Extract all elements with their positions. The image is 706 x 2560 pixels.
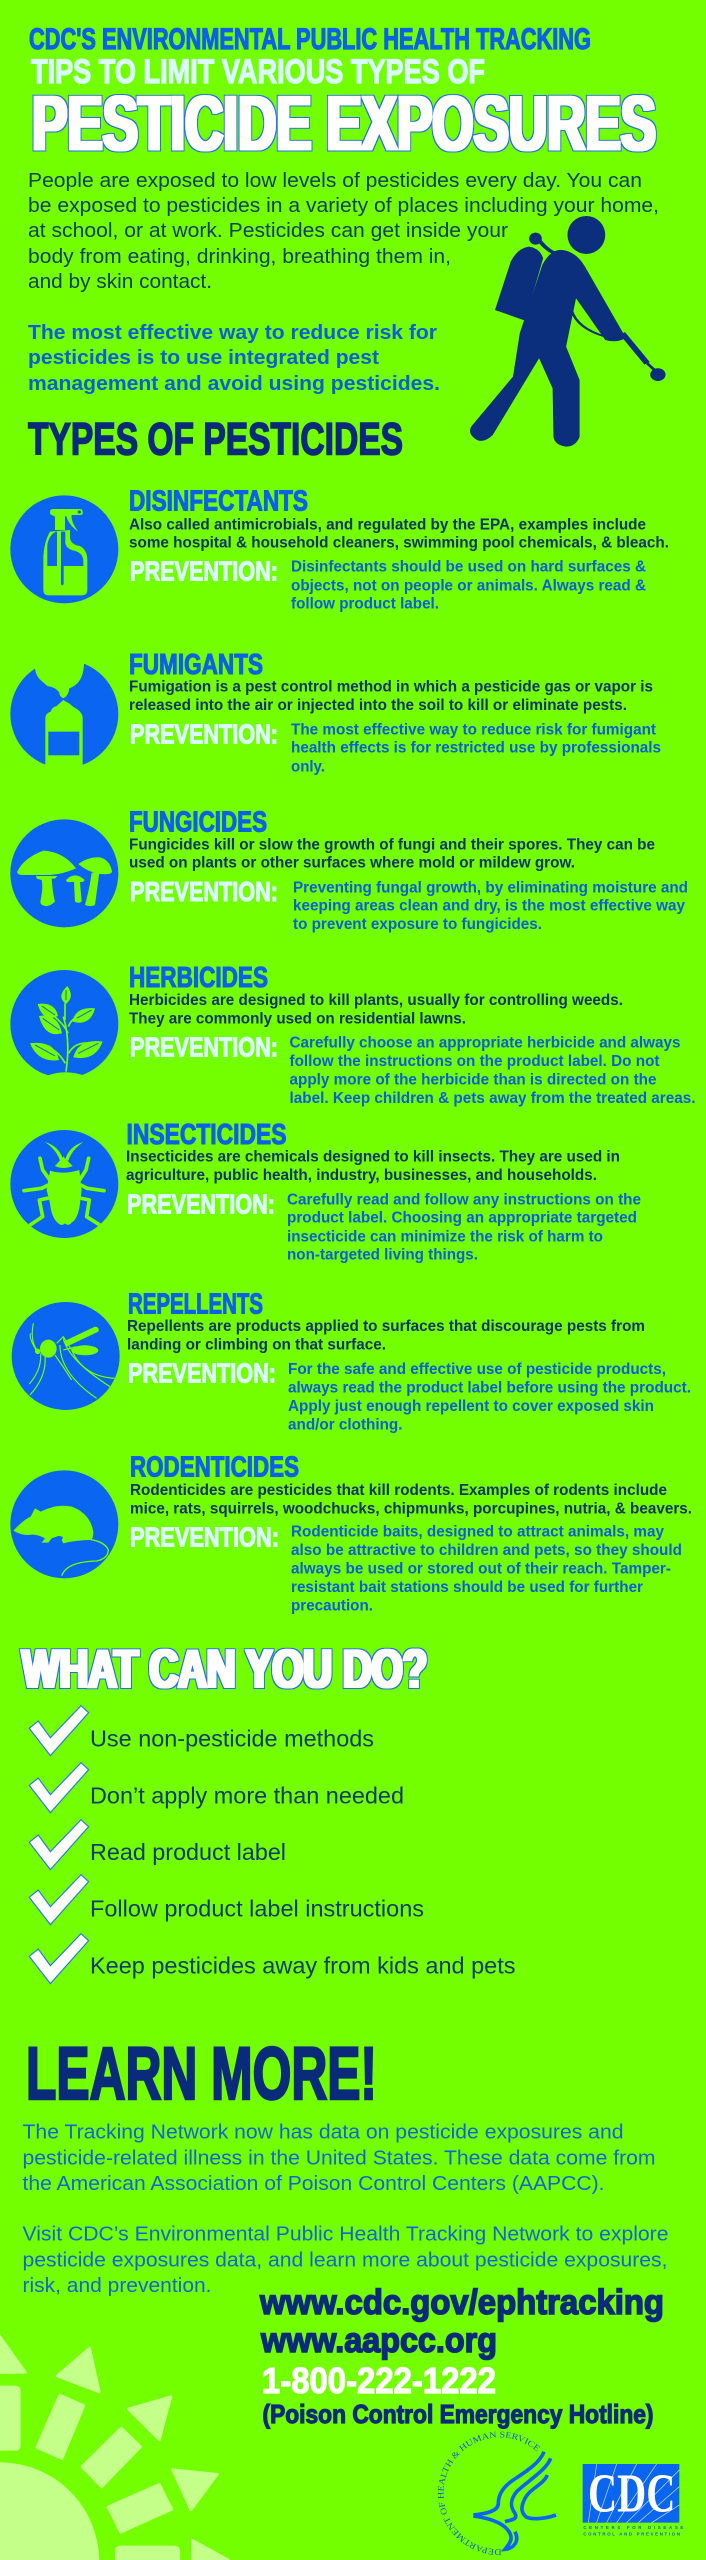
panel: fumigants	[10, 649, 661, 776]
prevention text: Disinfectants should be used on hard surfaces &	[291, 559, 646, 576]
contact links	[259, 2283, 664, 2429]
heading: RODENTICIDES	[130, 1452, 299, 1484]
prevention text: label. Keep children & pets away from the treated areas.	[290, 1090, 696, 1107]
panel: repellents	[12, 1288, 691, 1433]
icon: person spraying pesticide	[470, 216, 666, 447]
blue key message	[28, 322, 440, 395]
prevention label: PREVENTION:	[128, 1358, 276, 1389]
description	[129, 836, 655, 872]
prevention text: health effects is for restricted use by professionals	[291, 740, 661, 757]
learn more paragraph 1: the American Association of Poison Control Centers (AAPCC).	[22, 2173, 604, 2195]
prevention text: product label. Choosing an appropriate targeted	[287, 1210, 637, 1227]
prevention text	[291, 559, 646, 613]
prevention text	[287, 1191, 641, 1264]
prevention label: PREVENTION:	[130, 718, 278, 749]
icon: rat	[10, 1470, 118, 1578]
description: Herbicides are designed to kill plants, usually for controlling weeds.	[129, 992, 623, 1009]
prevention text: For the safe and effective use of pesticide products,	[288, 1361, 666, 1378]
description	[129, 992, 623, 1028]
prevention text: insecticide can minimize the risk of harm to	[287, 1228, 603, 1245]
description	[126, 1149, 620, 1184]
decorative sun	[0, 2335, 228, 2560]
prevention text: Rodenticide baits, designed to attract animals, may	[291, 1523, 664, 1540]
intro paragraph: be exposed to pesticides in a variety of places including your home,	[28, 194, 659, 217]
learn more paragraph 2: pesticide exposures data, and learn more about pesticide exposures,	[22, 2249, 668, 2271]
prevention text: resistant bait stations should be used for further	[291, 1579, 643, 1596]
heading: learn more: LEARN MORE!	[26, 2032, 377, 2115]
description	[129, 516, 669, 551]
prevention text: Preventing fungal growth, by eliminating moisture and	[293, 879, 688, 896]
prevention text: follow product label.	[291, 596, 439, 613]
prevention text: Carefully choose an appropriate herbicide and always	[290, 1035, 681, 1052]
title line: tips: TIPS TO LIMIT VARIOUS TYPES OF	[31, 53, 485, 91]
prevention text: apply more of the herbicide than is directed on the	[290, 1072, 657, 1089]
intro paragraph: body from eating, drinking, breathing them in,	[28, 245, 451, 268]
description: released into the air or injected into the soil to kill or eliminate pests.	[129, 697, 627, 714]
link: cdc tracking: www.cdc.gov/ephtracking	[259, 2283, 664, 2322]
icon: spray bottle	[10, 495, 118, 603]
description	[129, 679, 653, 714]
prevention text: only.	[291, 759, 325, 776]
description: They are commonly used on residential lawns.	[129, 1011, 466, 1028]
learn more paragraph 2: Visit CDC’s Environmental Public Health Tracking Network to explore	[22, 2224, 668, 2246]
learn more paragraph 1	[22, 2122, 656, 2195]
intro paragraph: and by skin contact.	[28, 270, 212, 293]
logo: cdc: CONTROL AND PREVENTION	[583, 2532, 680, 2537]
heading: what can you do: WHAT CAN YOU DO?	[22, 1638, 427, 1700]
prevention text	[288, 1361, 691, 1433]
logo: cdc: CDC	[588, 2462, 675, 2523]
intro paragraph: People are exposed to low levels of pesticides every day. You can	[28, 169, 642, 192]
prevention text	[291, 721, 661, 776]
description: used on plants or other surfaces where mold or mildew grow.	[129, 855, 575, 872]
heading: HERBICIDES	[129, 962, 268, 994]
link: aapcc: www.aapcc.org	[260, 2321, 497, 2360]
panel: insecticides	[10, 1119, 641, 1264]
blue key message: pesticides is to use integrated pest	[28, 347, 379, 369]
intro paragraph	[28, 169, 659, 293]
prevention text: Apply just enough repellent to cover exposed skin	[288, 1398, 654, 1415]
description: Also called antimicrobials, and regulated by the EPA, examples include	[129, 516, 646, 533]
description: landing or climbing on that surface.	[127, 1337, 386, 1354]
icon: check 5	[29, 1934, 89, 1984]
prevention label: PREVENTION:	[130, 876, 278, 907]
panel: disinfectants	[10, 486, 669, 613]
prevention label: PREVENTION:	[130, 556, 278, 587]
prevention text: follow the instructions on the product label. Do not	[290, 1053, 660, 1070]
heading: types of pesticides: TYPES OF PESTICIDES	[28, 414, 403, 464]
description: some hospital & household cleaners, swimming pool chemicals, & bleach.	[129, 534, 669, 551]
icon: insect	[10, 1130, 118, 1238]
prevention text: always read the product label before using the product.	[288, 1379, 691, 1396]
learn more paragraph 2: risk, and prevention.	[22, 2275, 212, 2297]
icon: check 4	[29, 1875, 89, 1925]
prevention text: always be used or stored out of their reach. Tamper-	[291, 1560, 671, 1577]
prevention text: objects, not on people or animals. Always read &	[291, 577, 646, 594]
prevention label: PREVENTION:	[127, 1188, 275, 1219]
prevention text	[291, 1523, 682, 1614]
description: Fungicides kill or slow the growth of fungi and their spores. They can be	[129, 836, 655, 853]
logo: cdc: CENTERS FOR DISEASE	[583, 2525, 683, 2530]
learn more paragraph 1: pesticide-related illness in the United States. These data come from	[22, 2147, 656, 2169]
prevention text: precaution.	[291, 1597, 373, 1614]
item 3: Read product label	[90, 1839, 286, 1865]
item 1: Use non-pesticide methods	[90, 1726, 374, 1752]
phone number: 1-800-222-1222	[262, 2360, 496, 2401]
icon: check 1	[29, 1706, 89, 1756]
prevention text: also be attractive to children and pets, so they should	[291, 1542, 682, 1559]
heading: DISINFECTANTS	[129, 486, 308, 518]
prevention text: non-targeted living things.	[287, 1247, 478, 1264]
description: agriculture, public health, industry, businesses, and households.	[126, 1167, 597, 1184]
item 4: Follow product label instructions	[90, 1896, 424, 1922]
icon: mushrooms	[10, 819, 118, 927]
prevention label: PREVENTION:	[130, 1522, 279, 1553]
prevention text: keeping areas clean and dry, is the most effective way	[293, 898, 685, 915]
heading: INSECTICIDES	[126, 1119, 286, 1151]
checklist	[29, 1706, 516, 1984]
icon: check 2	[29, 1763, 89, 1813]
intro paragraph: at school, or at work. Pesticides can get inside your	[28, 219, 508, 242]
header titles	[29, 23, 656, 167]
description: Fumigation is a pest control method in which a pesticide gas or vapor is	[129, 679, 653, 696]
prevention label: PREVENTION:	[130, 1032, 278, 1063]
blue key message: The most effective way to reduce risk for	[28, 322, 437, 344]
learn more paragraph 1: The Tracking Network now has data on pesticide exposures and	[22, 2122, 623, 2144]
item 5: Keep pesticides away from kids and pets	[90, 1952, 516, 1978]
icon: fumigant canister	[10, 653, 118, 770]
heading: REPELLENTS	[128, 1288, 263, 1320]
icon: check 3	[29, 1820, 89, 1870]
description	[127, 1318, 645, 1354]
description: Rodenticides are pesticides that kill rodents. Examples of rodents include	[130, 1482, 667, 1499]
panel: fungicides	[10, 807, 688, 933]
prevention text: The most effective way to reduce risk for fumigant	[291, 721, 657, 738]
panel: rodenticides	[10, 1452, 692, 1614]
learn more paragraph 2	[22, 2224, 668, 2297]
description: Insecticides are chemicals designed to kill insects. They are used in	[126, 1149, 620, 1166]
prevention text	[293, 879, 688, 933]
blue key message: management and avoid using pesticides.	[28, 373, 440, 395]
hotline label: (Poison Control Emergency Hotline)	[262, 2399, 654, 2429]
panel: herbicides	[10, 962, 696, 1107]
logo: department of health and human services: DEPARTMENT OF HEALTH & HUMAN SERVICES·USA	[438, 2432, 540, 2556]
description	[130, 1482, 692, 1517]
logo: cdc	[583, 2462, 683, 2537]
item 2: Don’t apply more than needed	[90, 1782, 404, 1808]
heading: FUNGICIDES	[129, 807, 267, 839]
prevention text	[290, 1035, 696, 1107]
prevention text: and/or clothing.	[288, 1416, 402, 1433]
heading: FUMIGANTS	[129, 649, 263, 681]
icon: plant	[10, 970, 118, 1083]
icon: mosquito	[12, 1302, 120, 1410]
prevention text: to prevent exposure to fungicides.	[293, 916, 542, 933]
description: mice, rats, squirrels, woodchucks, chipmunks, porcupines, nutria, & beavers.	[130, 1500, 692, 1517]
description: Repellents are products applied to surfaces that discourage pests from	[127, 1318, 645, 1335]
prevention text: Carefully read and follow any instructions on the	[287, 1191, 641, 1208]
